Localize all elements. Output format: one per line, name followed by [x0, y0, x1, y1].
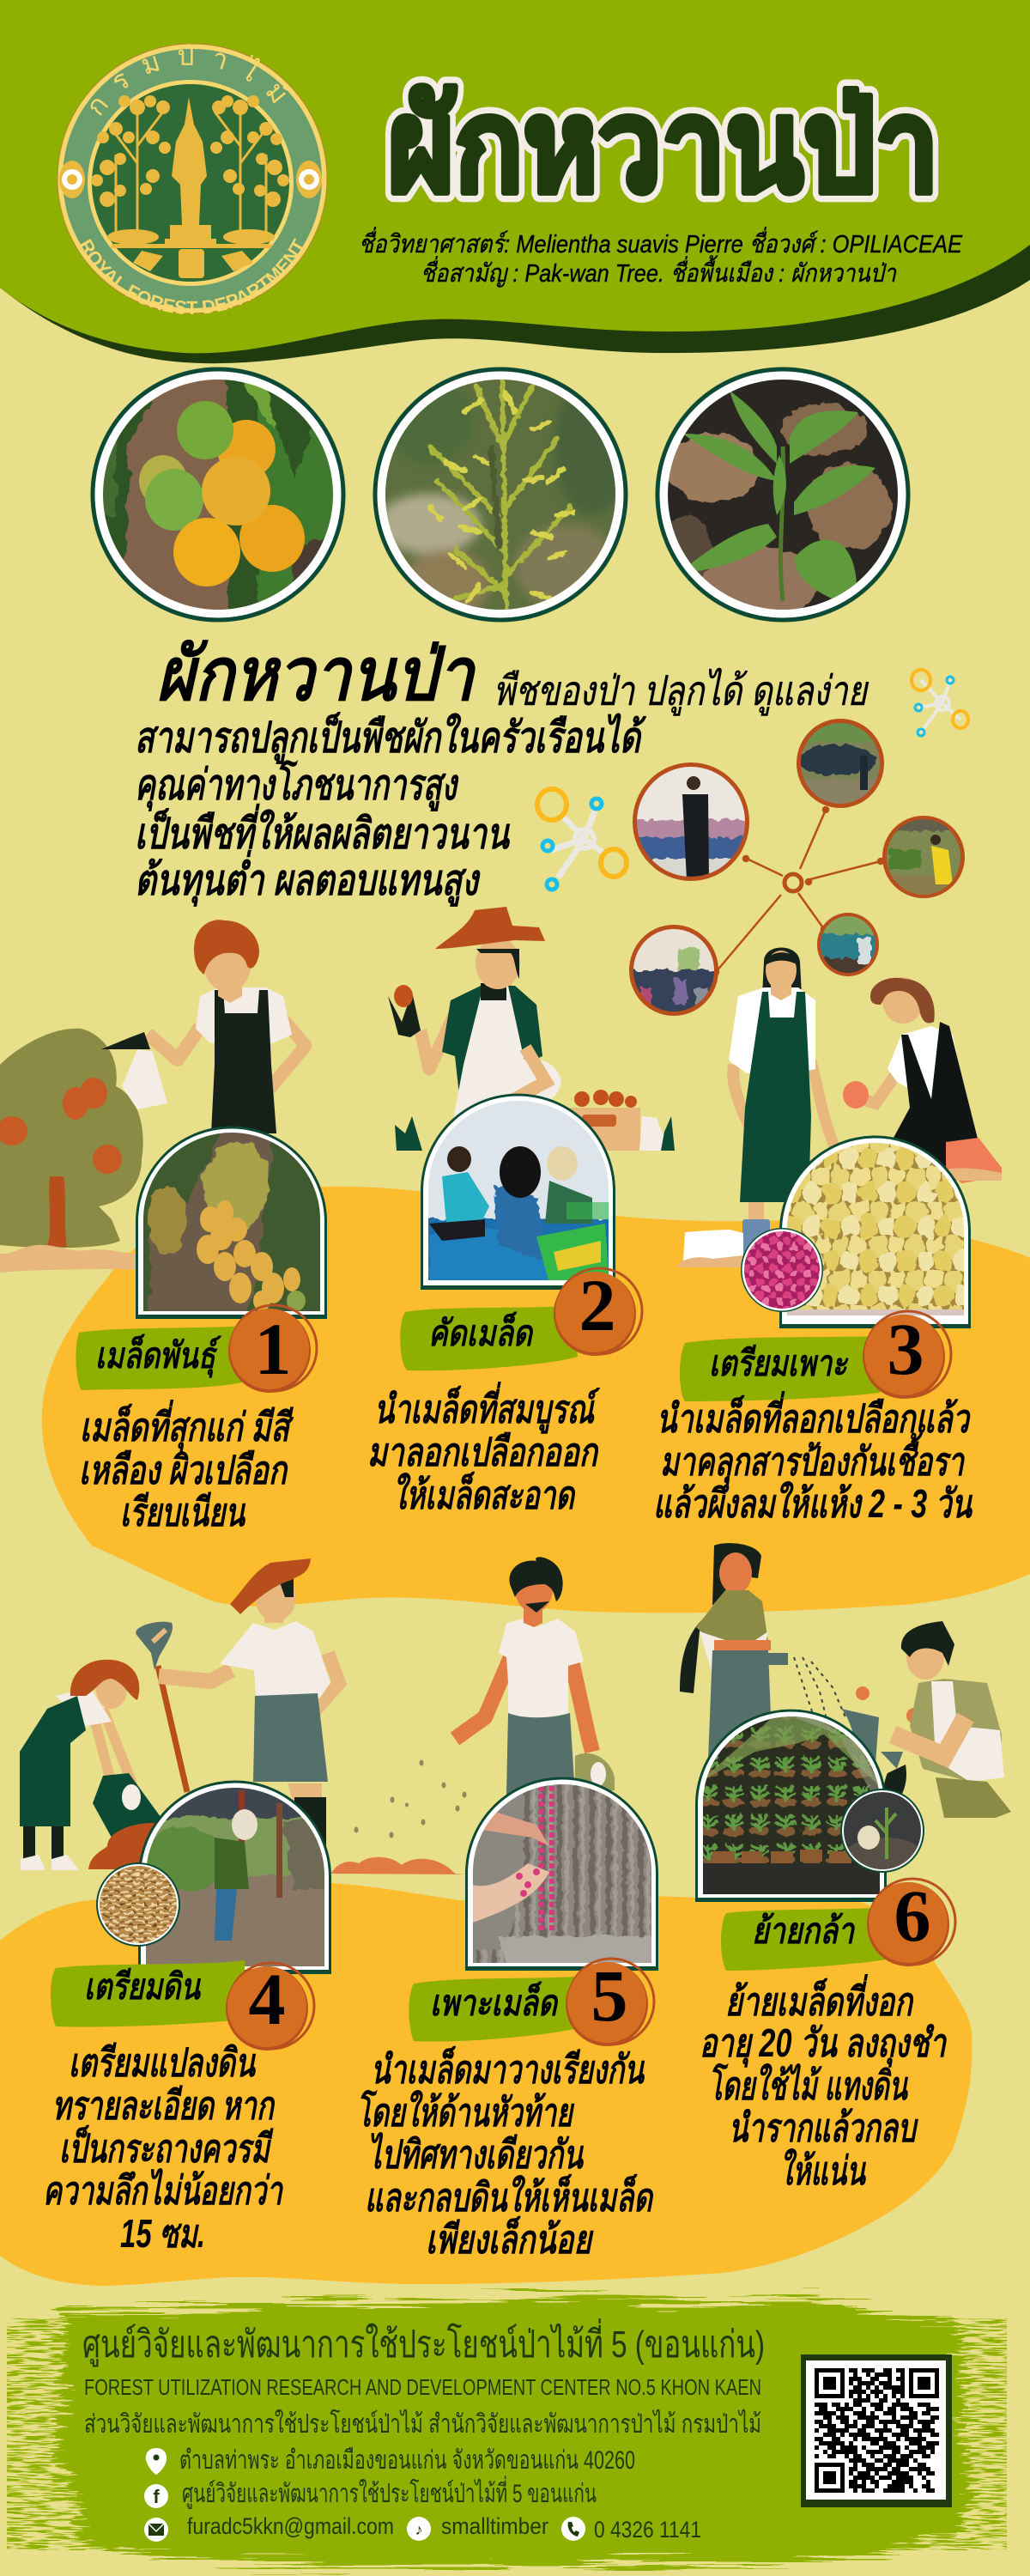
step 1 photo arch: [133, 1121, 330, 1319]
step 3 badge: [863, 1308, 951, 1399]
common name line: ชื่อสามัญ : Pak-wan Tree. ชื่อพื้นเมือง : ผักหวานป่า: [421, 255, 897, 288]
facebook name: ศูนย์วิจัยและพัฒนาการใช้ประโยชน์ป่าไม้ที่ 5 ขอนแก่น: [182, 2476, 597, 2509]
step 6 text: [700, 1973, 948, 2193]
step 6 badge: [867, 1874, 955, 1966]
illustration: paper and mound: [676, 1230, 743, 1267]
title: ผักหวานป่า: [388, 74, 939, 218]
step 5 badge: 5: [591, 1954, 628, 2037]
benefits list: ต้นทุนต่ำ ผลตอบแทนสูง: [135, 849, 481, 907]
illustration: woman bending with sack: [20, 1660, 163, 1870]
step 4 text: 15 ซม.: [120, 2211, 205, 2256]
step 4 label: เตรียมดิน: [84, 1966, 202, 2007]
step 3 inset photo: [738, 1226, 826, 1314]
step 1 text: เมล็ดที่สุกแก่ มีสี: [80, 1399, 294, 1452]
address: ตำบลท่าพระ อำเภอเมืองขอนแก่น จังหวัดขอนแก่น 40260: [179, 2446, 635, 2475]
seeds scattered: [354, 1760, 467, 1838]
step 3 badge: 3: [888, 1308, 924, 1390]
illustration: man with shovel: [136, 1558, 339, 1846]
step 6 inset photo: [840, 1789, 924, 1873]
logo: Royal Forest Department seal: ROYAL FOREST DEPARTMENT: [81, 238, 302, 314]
email: furadc5kkn@gmail.com: [187, 2513, 394, 2539]
icon: facebook: [144, 2484, 168, 2508]
step 4 text: ความลึกไม่น้อยกว่า: [43, 2167, 284, 2213]
benefits list: สามารถปลูกเป็นพืชผักในครัวเรือนได้: [135, 711, 646, 764]
footer division line: ส่วนวิจัยและพัฒนาการใช้ประโยชน์ป่าไม้ สำนักวิจัยและพัฒนาการป่าไม้ กรมป่าไม้: [84, 2409, 761, 2439]
footer brush panel: [7, 2294, 1007, 2569]
icon: location pin: [146, 2448, 167, 2475]
photo: group portrait: [817, 913, 879, 976]
step 2 text: นำเมล็ดที่สมบูรณ์: [374, 1381, 600, 1434]
step 1 label: เมล็ดพันธุ์: [95, 1334, 221, 1378]
step 1 text: [79, 1399, 294, 1534]
icon: facebook: f: [153, 2486, 160, 2507]
step 5 text: ไปทิศทางเดียวกัน: [367, 2131, 585, 2177]
icon: large network: [537, 789, 627, 890]
step 6 text: ให้แน่น: [779, 2148, 867, 2193]
step 5 badge: [566, 1954, 654, 2046]
step 5 label: เพาะเมล็ด: [430, 1981, 559, 2023]
logo: Royal Forest Department seal: กรมป่าไม้: [91, 44, 288, 116]
logo: Royal Forest Department seal: [57, 43, 328, 314]
step 6 text: นำรากแล้วกลบ: [729, 2105, 918, 2150]
step 2 photo arch: [421, 1091, 618, 1290]
icon: tiktok: ♪: [415, 2521, 422, 2538]
benefits list: เป็นพืชที่ให้ผลผลิตยาวนาน: [135, 803, 510, 858]
heading tagline: พืชของป่า ปลูกได้ ดูแลง่าย: [494, 667, 869, 716]
step 5 text: และกลบดินให้เห็นเมล็ด: [365, 2173, 654, 2220]
step 4 badge: [226, 1958, 314, 2050]
illustration: farmer with tomato: [388, 907, 561, 1133]
illustration: woman in green apron: [729, 948, 845, 1262]
step 3 label: [680, 1336, 880, 1401]
step 4 label: [51, 1960, 245, 2027]
photo network connectors: [713, 807, 883, 975]
step 6 badge: 6: [894, 1874, 930, 1957]
step 2 badge: [554, 1264, 642, 1356]
step 5 photo arch: [464, 1773, 661, 1971]
icon: phone: [561, 2517, 585, 2541]
step 2 text: ให้เมล็ดสะอาด: [392, 1471, 576, 1517]
footer heading: ศูนย์วิจัยและพัฒนาการใช้ประโยชน์ป่าไม้ที่ 5 (ขอนแก่น): [82, 2318, 765, 2367]
QR code: [801, 2354, 952, 2507]
step 2 badge: 2: [579, 1264, 616, 1346]
icon: tiktok: [407, 2517, 431, 2541]
background blob: lower steps: [0, 1883, 972, 2286]
tiktok handle: smalltimber: [441, 2513, 548, 2539]
step 5 text: [356, 2045, 654, 2262]
title: ผักหวานป่า: [388, 74, 939, 218]
header banner: [0, 0, 1030, 363]
step 4 text: เตรียมแปลงดิน: [69, 2040, 257, 2085]
photo: audience in hall: [629, 925, 718, 1016]
step 1 text: เรียบเนียน: [120, 1490, 246, 1534]
step 6 label: [721, 1907, 887, 1971]
step 4 text: [43, 2040, 284, 2256]
illustration: crate of tomatoes: [395, 1090, 675, 1151]
step 6 text: ย้ายเมล็ดที่งอก: [725, 1973, 914, 2024]
illustration: woman with spray bottle: [101, 920, 306, 1133]
illustration: tree: [0, 1029, 143, 1273]
icon: mail: [144, 2518, 168, 2542]
step 6 photo arch: [695, 1709, 888, 1902]
step 1 text: เหลือง ผิวเปลือก: [79, 1448, 288, 1492]
icon: small network: [912, 670, 968, 736]
illustration: woman tending plants: [841, 1621, 1011, 1820]
photo: training in hall: [633, 762, 749, 881]
step 2 label: คัดเมล็ด: [428, 1311, 534, 1353]
background blob: upper steps: [42, 1187, 1030, 1613]
step 3 label: เตรียมเพาะ: [709, 1343, 849, 1383]
illustration: woman watering: [680, 1543, 845, 1760]
benefits list: คุณค่าทางโภชนาการสูง: [135, 759, 459, 811]
step 3 text: [653, 1390, 973, 1526]
step 5 text: โดยให้ด้านหัวท้าย: [356, 2089, 575, 2135]
heading: ผักหวานป่า: ผักหวานป่า: [156, 634, 476, 716]
footer English name: FOREST UTILIZATION RESEARCH AND DEVELOPMENT CENTER NO.5 KHON KAEN: [84, 2374, 761, 2400]
step 4 text: เป็นกระถางควรมี: [59, 2124, 274, 2171]
photo: outdoor group: [797, 719, 884, 808]
step 4 photo arch: [137, 1773, 335, 1975]
step 6 text: โดยใช้ไม้ แทงดิน: [708, 2063, 909, 2108]
step 5 text: เพียงเล็กน้อย: [426, 2215, 594, 2262]
step 1 badge: [228, 1305, 317, 1393]
illustration: man sowing seeds: [455, 1557, 615, 1795]
step 4 text: ทรายละเอียด หาก: [52, 2083, 276, 2128]
photo: ripe fruit: [86, 361, 352, 627]
step 1 label: [76, 1326, 243, 1390]
step 6 label: ย้ายกล้า: [752, 1911, 856, 1951]
step 1 badge: 1: [254, 1308, 292, 1390]
step 5 label: [409, 1977, 578, 2042]
photo: field demo: [882, 816, 965, 898]
step 5 text: นำเมล็ดมาวางเรียงกัน: [371, 2045, 645, 2092]
photo: seedling in pots: [652, 361, 918, 627]
step 6 text: อายุ 20 วัน ลงถุงชำ: [700, 2020, 948, 2068]
phone number: 0 4326 1141: [594, 2517, 701, 2543]
illustration: woman crouching with fruit: [843, 977, 1002, 1183]
step 4 inset photo: [94, 1861, 182, 1948]
step 2 label: [400, 1305, 578, 1370]
benefits list: [135, 711, 646, 907]
step 4 badge: 4: [249, 1958, 285, 2040]
step 2 text: มาลอกเปลือกออก: [367, 1430, 599, 1474]
step 3 photo arch: [777, 1129, 974, 1328]
mound: [331, 1857, 465, 1874]
photo: young shoots: [375, 369, 631, 620]
step 2 text: [367, 1381, 600, 1517]
scientific name line: ชื่อวิทยาศาสตร์: Melientha suavis Pierre ชื่อวงศ์ : OPILIACEAE: [359, 227, 963, 258]
